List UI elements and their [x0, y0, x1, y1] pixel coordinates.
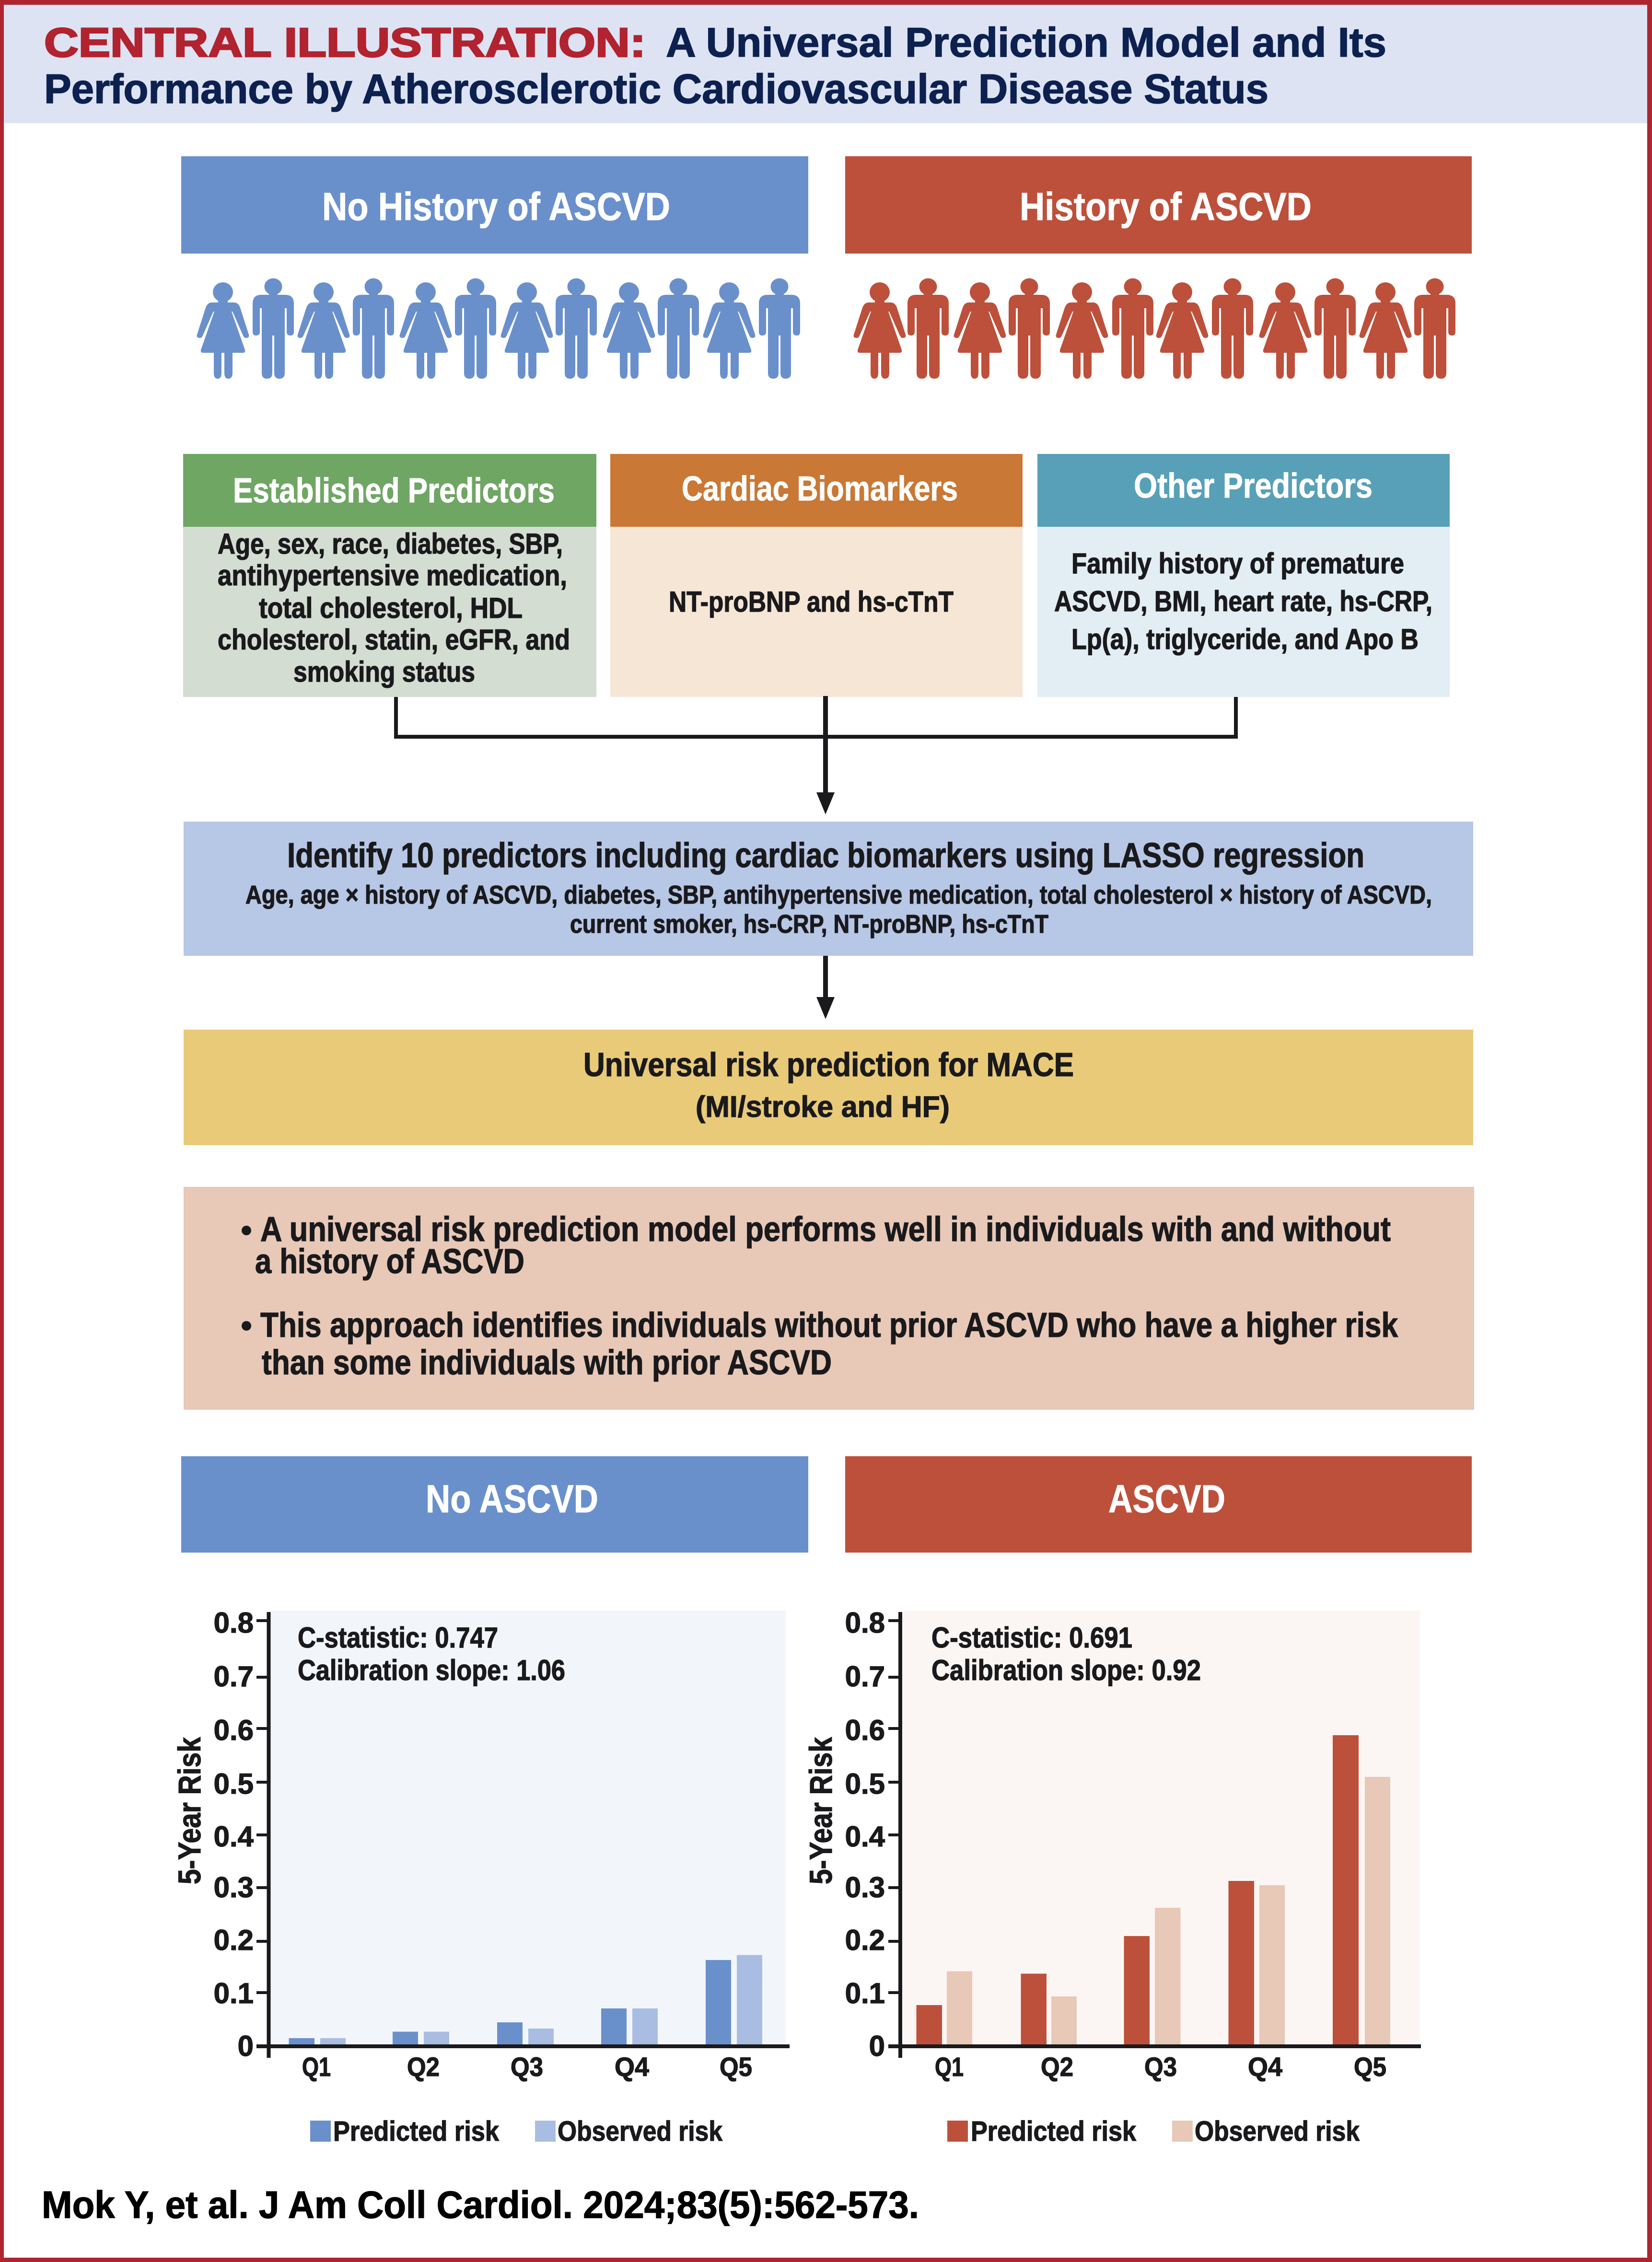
panel: universal risk prediction: (MI/stroke and HF): [696, 1090, 950, 1124]
statistics: no ASCVD: C-statistic: 0.747: [298, 1622, 498, 1654]
bar chart: ASCVD: [803, 1607, 1421, 2147]
x-axis labels: no ASCVD: Q4: [615, 2052, 649, 2082]
statistics: ASCVD: [931, 1622, 1201, 1686]
x-axis labels: ASCVD: Q4: [1248, 2052, 1282, 2082]
legend: ASCVD: [947, 2116, 1360, 2147]
heading: no ASCVD: No ASCVD: [426, 1477, 598, 1521]
bars: no ASCVD: [289, 1955, 762, 2046]
legend: no ASCVD: Predicted risk: [333, 2116, 500, 2147]
title band: [4, 5, 1647, 123]
y-axis tick labels: ASCVD: 0.3: [845, 1871, 885, 1903]
citation: Mok Y, et al. J Am Coll Cardiol. 2024;83(5):562-573.: [42, 2183, 919, 2226]
statistics: ASCVD: C-statistic: 0.691: [931, 1622, 1132, 1654]
panel: other predictors: Other Predictors: [1134, 467, 1373, 505]
y-axis title: no ASCVD: 5-Year Risk: [172, 1737, 207, 1884]
y-axis tick labels: ASCVD: 0.7: [845, 1660, 885, 1693]
x-axis labels: ASCVD: Q2: [1041, 2052, 1073, 2082]
axes: no ASCVD: [256, 1612, 790, 2058]
panel: established predictors: [183, 454, 596, 697]
y-axis tick labels: ASCVD: 0: [869, 2030, 885, 2062]
panel: history of ASCVD header: [845, 156, 1472, 254]
y-axis tick labels: no ASCVD: 0.8: [214, 1607, 254, 1639]
y-axis tick labels: no ASCVD: [214, 1607, 254, 2062]
y-axis tick labels: no ASCVD: 0.3: [214, 1871, 254, 1903]
panel: other predictors: Family history of premature: [1071, 547, 1404, 580]
panel: LASSO predictors: Identify 10 predictors including cardiac biomarkers using LASSO regression: [287, 836, 1364, 875]
panel: no history of ASCVD header: No History of ASCVD: [322, 185, 670, 229]
panel: established predictors: antihypertensive medication,: [218, 559, 567, 592]
statistics: no ASCVD: Calibration slope: 1.06: [298, 1654, 565, 1686]
y-axis tick labels: ASCVD: 0.8: [845, 1607, 885, 1639]
y-axis tick labels: ASCVD: 0.2: [845, 1924, 885, 1956]
y-axis tick labels: ASCVD: 0.5: [845, 1768, 885, 1800]
y-axis tick labels: no ASCVD: 0.6: [214, 1714, 254, 1746]
statistics: no ASCVD: [298, 1622, 565, 1686]
panel: other predictors: ASCVD, BMI, heart rate, hs-CRP,: [1054, 585, 1432, 617]
x-axis labels: no ASCVD: [302, 2052, 752, 2082]
heading: ASCVD: ASCVD: [1108, 1477, 1225, 1521]
x-axis labels: ASCVD: Q1: [935, 2052, 964, 2082]
icon: red people row: [854, 278, 1455, 379]
title band: A Universal Prediction Model and Its: [666, 20, 1386, 66]
y-axis tick labels: no ASCVD: 0.5: [214, 1768, 254, 1800]
panel: cardiac biomarkers: Cardiac Biomarkers: [682, 470, 958, 508]
panel: no history of ASCVD header: [181, 156, 808, 254]
panel: cardiac biomarkers: NT-proBNP and hs-cTnT: [669, 586, 954, 618]
heading: no ASCVD: [181, 1456, 808, 1553]
icon: blue people row: [197, 278, 800, 379]
legend: ASCVD: Predicted risk: [971, 2116, 1137, 2147]
panel: universal risk prediction: Universal risk prediction for MACE: [583, 1046, 1074, 1083]
panel: LASSO predictors: Age, age × history of ASCVD, diabetes, SBP, antihypertensive medication, total cholesterol × history of ASCVD,: [245, 881, 1432, 909]
y-axis tick labels: ASCVD: 0.4: [845, 1821, 885, 1853]
x-axis labels: no ASCVD: Q1: [302, 2052, 331, 2082]
y-axis tick labels: no ASCVD: 0.1: [214, 1977, 254, 2009]
bars: ASCVD: [917, 1735, 1390, 2046]
y-axis tick labels: no ASCVD: 0: [238, 2030, 254, 2062]
x-axis labels: no ASCVD: Q5: [720, 2052, 752, 2082]
panel: established predictors: Established Predictors: [233, 472, 555, 510]
panel: key takeaways: a history of ASCVD: [255, 1242, 524, 1281]
y-axis title: ASCVD: 5-Year Risk: [803, 1737, 838, 1884]
panel: cardiac biomarkers: [610, 454, 1023, 697]
legend: no ASCVD: Observed risk: [558, 2116, 723, 2147]
panel: key takeaways: than some individuals with prior ASCVD: [262, 1344, 832, 1382]
panel: LASSO predictors: current smoker, hs-CRP, NT-proBNP, hs-cTnT: [570, 910, 1048, 939]
arrow: LASSO to universal risk: [816, 956, 835, 1019]
panel: universal risk prediction: [184, 1030, 1473, 1145]
panel: other predictors: [1037, 454, 1450, 697]
x-axis labels: ASCVD: Q3: [1144, 2052, 1177, 2082]
panel: established predictors: total cholesterol, HDL: [259, 592, 523, 624]
y-axis tick labels: no ASCVD: 0.4: [214, 1821, 254, 1853]
axes: ASCVD: [888, 1612, 1421, 2058]
panel: established predictors: smoking status: [293, 656, 475, 688]
x-axis labels: ASCVD: [935, 2052, 1386, 2082]
panel: history of ASCVD header: History of ASCVD: [1020, 185, 1312, 229]
statistics: ASCVD: Calibration slope: 0.92: [931, 1654, 1201, 1686]
y-axis tick labels: ASCVD: 0.1: [845, 1977, 885, 2009]
title band: Performance by Atherosclerotic Cardiovascular Disease Status: [44, 66, 1268, 112]
x-axis labels: no ASCVD: Q2: [407, 2052, 440, 2082]
y-axis tick labels: no ASCVD: 0.2: [214, 1924, 254, 1956]
legend: no ASCVD: [310, 2116, 723, 2147]
panel: other predictors: Lp(a), triglyceride, and Apo B: [1071, 623, 1419, 655]
panel: key takeaways: [184, 1187, 1474, 1410]
panel: established predictors: cholesterol, statin, eGFR, and: [218, 624, 570, 656]
y-axis tick labels: ASCVD: [845, 1607, 885, 2062]
panel: LASSO predictors: [184, 822, 1473, 956]
panel: key takeaways: A universal risk prediction model performs well in individuals with and without: [260, 1210, 1391, 1249]
title band: CENTRAL ILLUSTRATION:: [44, 20, 646, 66]
x-axis labels: ASCVD: Q5: [1354, 2052, 1386, 2082]
y-axis tick labels: no ASCVD: 0.7: [214, 1660, 254, 1693]
panel: established predictors: Age, sex, race, diabetes, SBP,: [218, 528, 563, 560]
heading: ASCVD: [845, 1456, 1472, 1553]
x-axis labels: no ASCVD: Q3: [511, 2052, 543, 2082]
legend: ASCVD: Observed risk: [1195, 2116, 1360, 2147]
y-axis tick labels: ASCVD: 0.6: [845, 1714, 885, 1746]
panel: key takeaways: This approach identifies individuals without prior ASCVD who have a higher risk: [260, 1306, 1398, 1345]
bar chart: no ASCVD: [172, 1607, 790, 2147]
arrow: predictors merge into LASSO: [396, 696, 1236, 814]
